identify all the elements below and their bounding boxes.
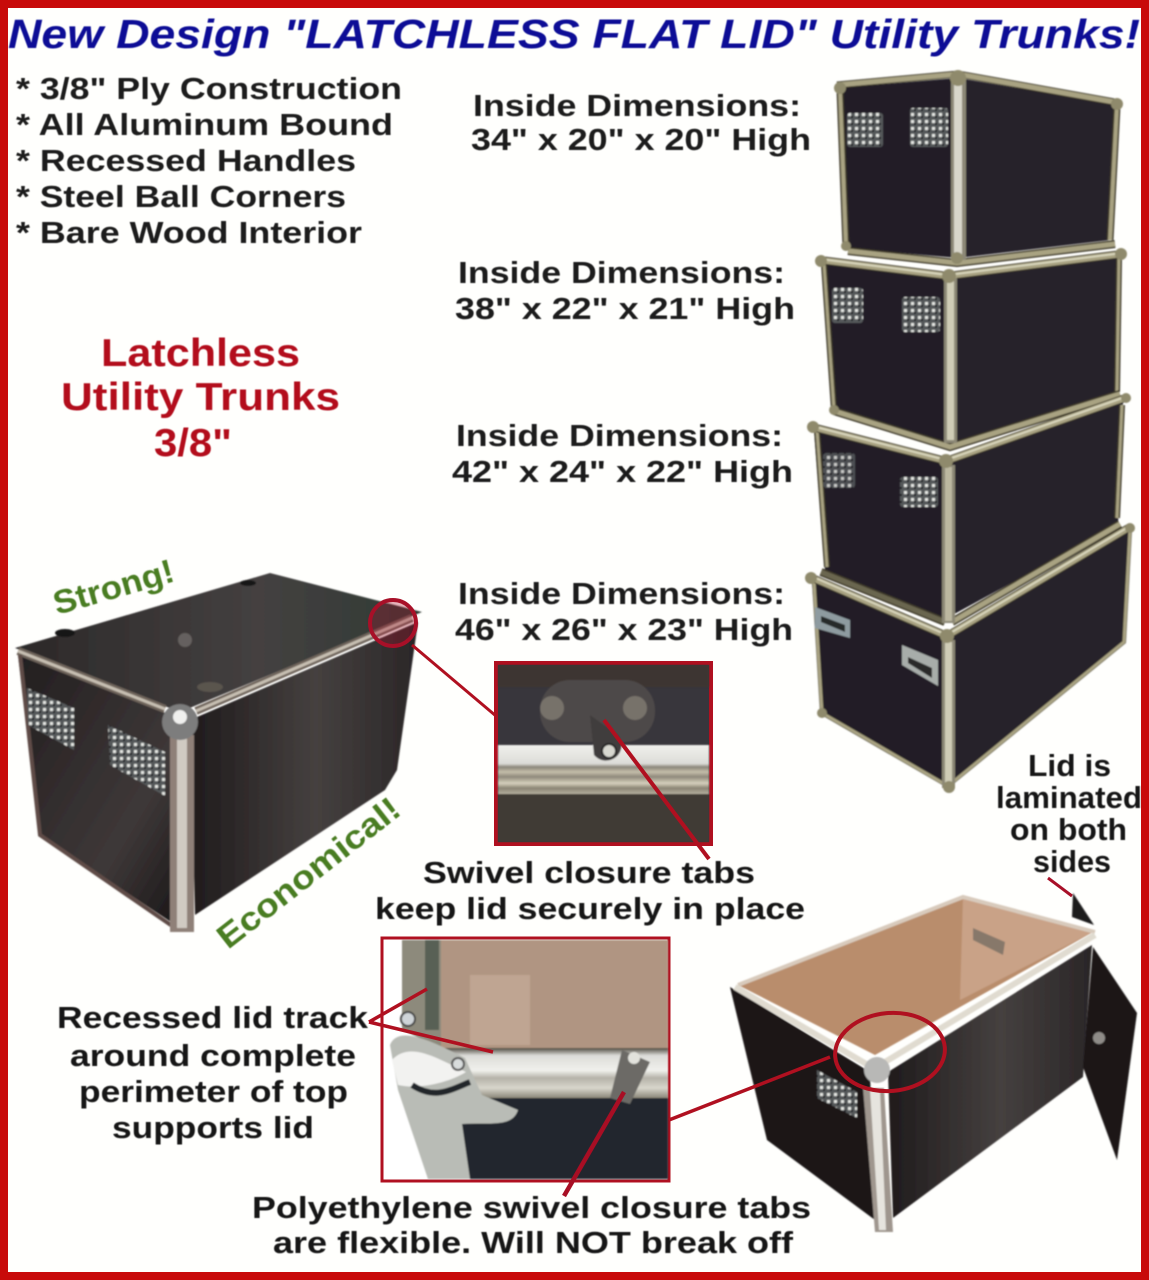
recessed lid track caption <box>57 1000 369 1145</box>
leader line: polyethylene tab <box>564 1092 624 1196</box>
ball corner <box>864 1057 890 1083</box>
dimensions: 46 x 26 x 23: Inside Dimensions: <box>458 576 785 611</box>
swivel caption <box>375 855 805 926</box>
feature list: * 3/8" Ply Construction <box>16 71 402 106</box>
leader line to lid track inset <box>669 1057 830 1120</box>
trunk 4 bottom <box>805 523 1135 793</box>
leader line to swivel tab inset <box>412 645 496 716</box>
feature list: * Steel Ball Corners <box>16 179 346 214</box>
zoom circle on closed trunk <box>370 600 416 646</box>
swivel caption: keep lid securely in place <box>375 891 805 926</box>
aluminum strip <box>498 745 709 794</box>
economical label: Economical! <box>210 790 407 956</box>
leader line: lid <box>1048 878 1072 896</box>
dimensions: 34 x 20 x 20 <box>471 88 811 157</box>
laminated lid caption: Lid is <box>1028 748 1111 783</box>
polyethylene caption: Polyethylene swivel closure tabs <box>252 1190 811 1225</box>
red heading: latchless utility trunks <box>61 332 340 465</box>
swivel plate <box>540 680 655 742</box>
trunk 1 top <box>834 70 1123 264</box>
feature list <box>16 71 402 250</box>
laminated lid caption: sides <box>1033 844 1111 879</box>
polyethylene caption <box>252 1190 811 1260</box>
corner balls <box>834 70 1123 264</box>
handle <box>902 645 938 686</box>
laminated lid caption: laminated <box>996 780 1142 815</box>
dimensions: 46 x 26 x 23 <box>455 576 793 647</box>
trunk 3 <box>807 393 1131 623</box>
red heading: latchless utility trunks: 3/8" <box>154 422 232 465</box>
dimensions: 34 x 20 x 20: 34" x 20" x 20" High <box>471 122 811 157</box>
dimensions: 34 x 20 x 20: Inside Dimensions: <box>473 88 801 123</box>
title: New Design "LATCHLESS FLAT LID" Utility Trunks! <box>8 11 1140 57</box>
dimensions: 42 x 24 x 22: Inside Dimensions: <box>456 418 783 453</box>
trunk 2 <box>815 248 1127 447</box>
dimensions: 38 x 22 x 21: 38" x 22" x 21" High <box>455 291 795 326</box>
feature list: * Bare Wood Interior <box>16 215 362 250</box>
handle <box>910 108 948 147</box>
laminated lid caption <box>996 748 1142 879</box>
ball corner <box>162 704 198 740</box>
interior <box>738 897 1093 1055</box>
strong label: Strong! <box>49 552 178 622</box>
interior handle plate <box>973 928 1005 955</box>
leader lines: lid track <box>369 989 493 1052</box>
red heading: latchless utility trunks: Latchless <box>101 332 300 375</box>
lid edge sliver <box>1072 893 1094 925</box>
tab rivet <box>590 715 622 761</box>
handle <box>27 688 74 750</box>
dimensions: 42 x 24 x 22 <box>452 418 793 489</box>
inset: lid track <box>382 938 669 1181</box>
dimensions: 46 x 26 x 23: 46" x 26" x 23" High <box>455 612 793 647</box>
red heading: latchless utility trunks: Utility Trunks <box>61 376 340 419</box>
handle <box>817 1070 857 1118</box>
lid <box>15 573 422 712</box>
corner balls <box>807 393 1131 468</box>
feature list: * Recessed Handles <box>16 143 356 178</box>
corner bracket <box>390 1035 518 1179</box>
corner balls <box>815 248 1127 415</box>
laminated lid caption: on both <box>1010 812 1127 847</box>
handle <box>832 288 863 323</box>
inset: swivel tab <box>496 663 711 844</box>
hinged lid <box>1083 947 1137 1160</box>
handle <box>108 725 165 796</box>
dimensions: 42 x 24 x 22: 42" x 24" x 22" High <box>452 454 793 489</box>
recessed lid track caption: supports lid <box>112 1110 314 1145</box>
dimensions: 38 x 22 x 21 <box>455 255 795 326</box>
recessed lid track caption: Recessed lid track <box>57 1000 369 1035</box>
dimensions: 38 x 22 x 21: Inside Dimensions: <box>458 255 785 290</box>
right face <box>190 622 418 915</box>
handle <box>902 297 940 332</box>
left face <box>730 987 875 1220</box>
handle <box>823 453 855 488</box>
lid tabs <box>55 580 256 692</box>
handle <box>900 477 938 507</box>
right face <box>888 945 1092 1218</box>
zoom circle on open trunk <box>832 1008 948 1096</box>
handle <box>815 607 850 638</box>
swivel caption: Swivel closure tabs <box>423 855 755 890</box>
open trunk photo <box>730 893 1137 1232</box>
handle <box>847 113 883 147</box>
polyethylene caption: are flexible. Will NOT break off <box>273 1225 794 1260</box>
corner balls <box>805 523 1135 793</box>
trunk stack <box>805 70 1135 793</box>
recessed lid track caption: perimeter of top <box>79 1074 348 1109</box>
leader line: swivel tab <box>604 720 709 859</box>
feature list: * All Aluminum Bound <box>16 107 393 142</box>
recessed lid track caption: around complete <box>70 1038 356 1073</box>
left face <box>18 655 183 930</box>
closed trunk photo <box>15 573 422 932</box>
swivel tab <box>610 1050 650 1104</box>
